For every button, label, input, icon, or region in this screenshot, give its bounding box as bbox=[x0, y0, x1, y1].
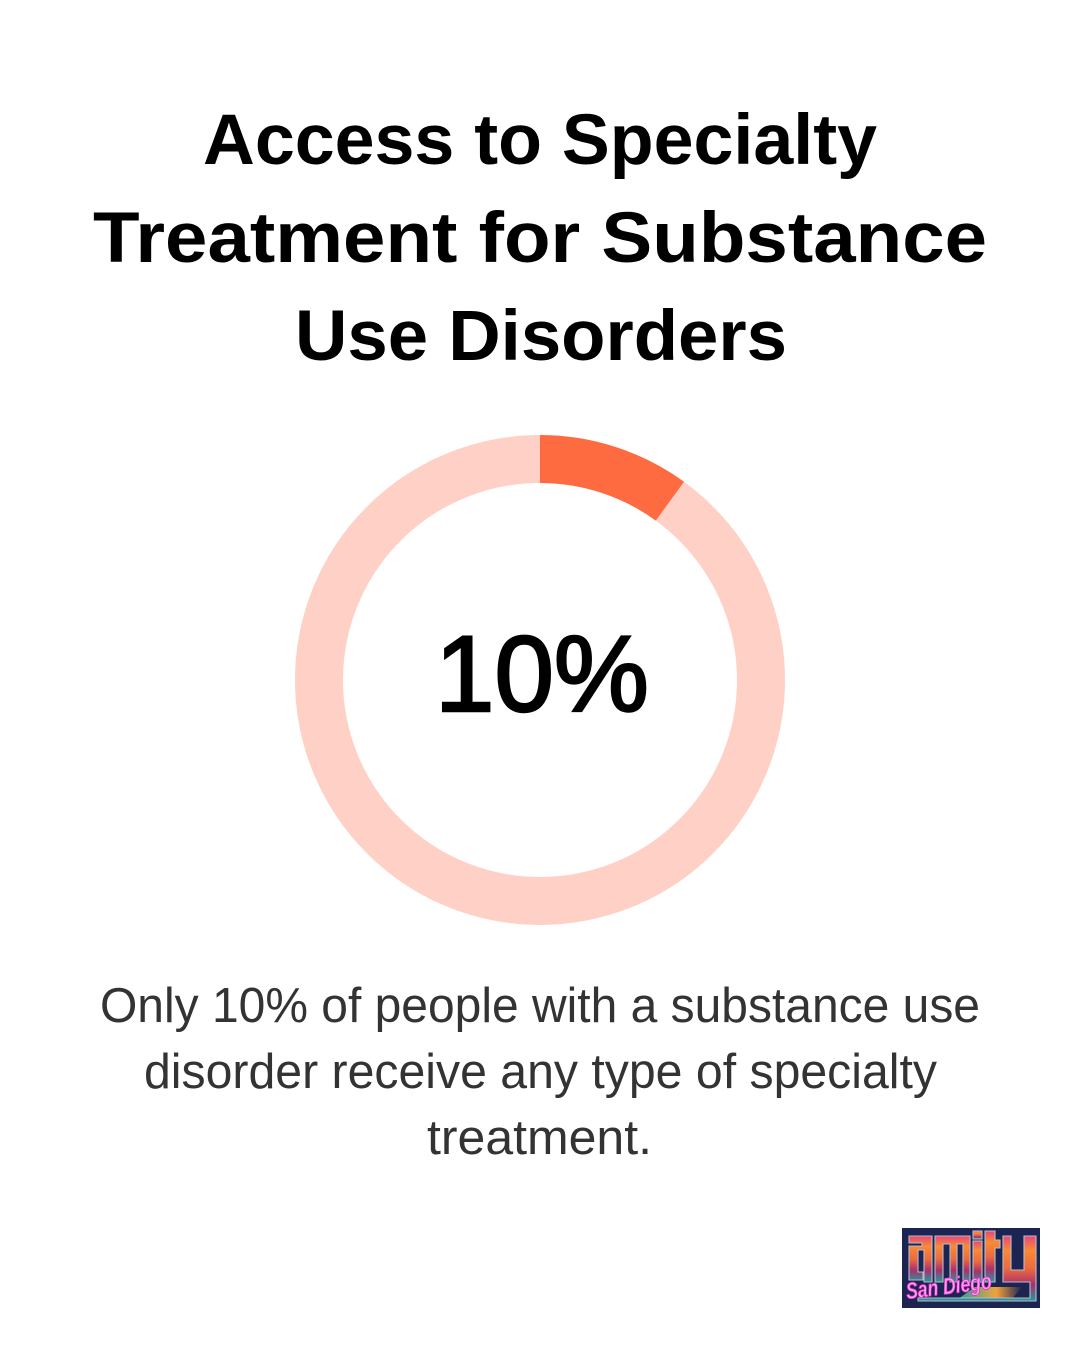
title: Access to Specialty bbox=[203, 101, 878, 180]
description text: Only 10% of people with a substance use bbox=[100, 979, 980, 1033]
chart value: 10% bbox=[435, 613, 649, 734]
logo letter blocks bbox=[909, 1231, 1036, 1301]
description text bbox=[100, 979, 980, 1165]
logo background bbox=[902, 1228, 1040, 1308]
logo script: San Diego: San Diego bbox=[904, 1268, 993, 1304]
title: Use Disorders bbox=[295, 297, 787, 376]
logo sea reflection bbox=[958, 1287, 1022, 1299]
logo: Amity San Diego bbox=[902, 1228, 1040, 1308]
title bbox=[93, 101, 987, 376]
description text: treatment. bbox=[427, 1111, 652, 1165]
chart track: remaining 90% bbox=[319, 459, 761, 901]
donut chart: 10% bbox=[319, 435, 761, 901]
description text: disorder receive any type of specialty bbox=[144, 1045, 937, 1099]
title: Treatment for Substance bbox=[93, 199, 987, 278]
chart segment: 10% bbox=[540, 435, 684, 521]
